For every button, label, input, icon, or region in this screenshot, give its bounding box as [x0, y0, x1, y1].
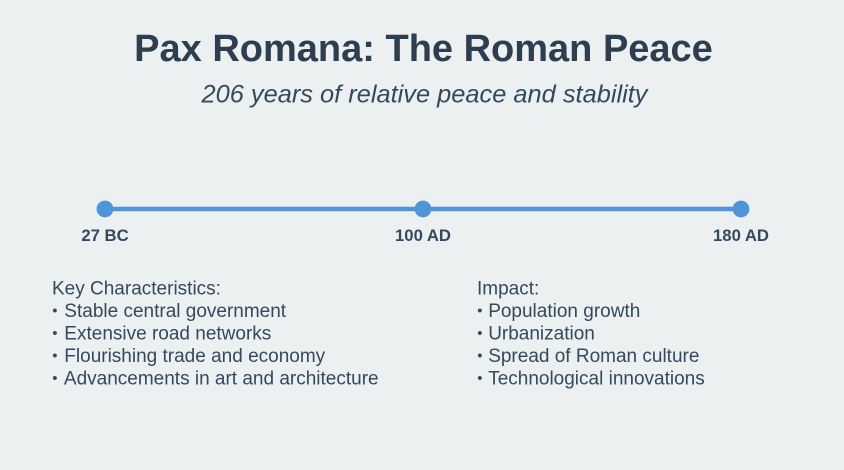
text block: key characteristics: Stable central government	[64, 301, 287, 322]
text block: key characteristics: Extensive road networks	[64, 324, 271, 345]
text block: key characteristics	[52, 279, 379, 390]
timeline line	[105, 207, 741, 211]
text block: key characteristics: Flourishing trade and economy	[64, 346, 326, 367]
marker: 180 AD	[713, 201, 769, 245]
text block: key characteristics: •	[52, 370, 57, 387]
text block: impact: Technological innovations	[488, 369, 705, 390]
text block: impact: Population growth	[488, 301, 640, 322]
text block: impact: Spread of Roman culture	[488, 346, 699, 367]
title: Pax Romana: The Roman Peace	[134, 28, 713, 70]
text block: key characteristics: •	[52, 348, 57, 364]
text block: impact: Impact:	[477, 279, 539, 300]
text block: impact: •	[477, 348, 482, 364]
text block: key characteristics: Advancements in art and architecture	[64, 369, 379, 390]
text block: impact	[477, 279, 705, 390]
text block: key characteristics: •	[52, 325, 57, 342]
text block: impact: •	[477, 325, 482, 342]
text block: key characteristics: Key Characteristics:	[52, 279, 221, 300]
text block: impact: Urbanization	[488, 324, 595, 345]
marker: 100 AD	[395, 201, 451, 245]
text block: impact: •	[477, 302, 482, 320]
marker: 27 BC	[81, 201, 129, 245]
marker: 100 AD: 100 AD	[395, 226, 451, 245]
marker: 27 BC: 27 BC	[81, 226, 129, 245]
marker: 180 AD: 180 AD	[713, 226, 769, 245]
subtitle: 206 years of relative peace and stability	[200, 80, 649, 108]
timeline	[81, 201, 769, 245]
text block: key characteristics: •	[52, 302, 57, 320]
text block: impact: •	[477, 370, 482, 387]
